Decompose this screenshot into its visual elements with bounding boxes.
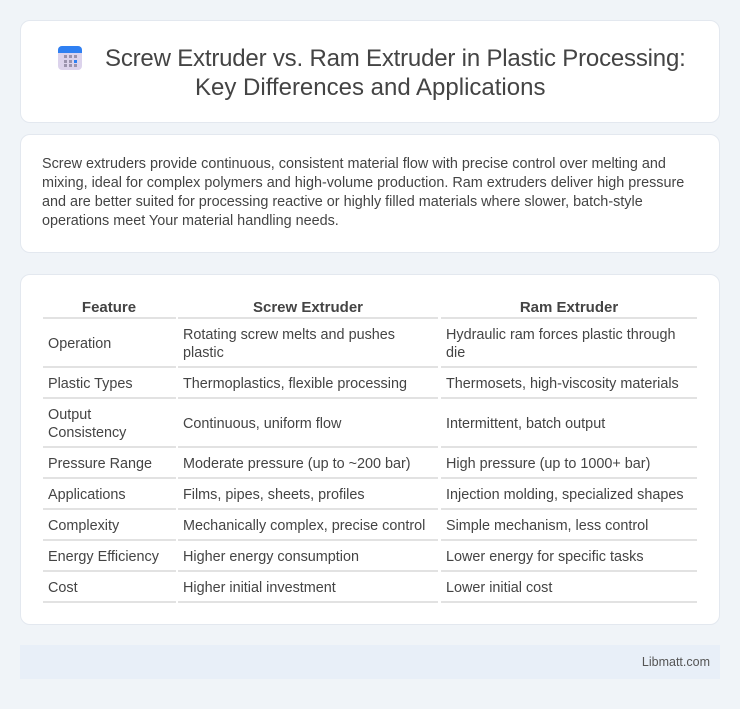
row: complexity: Complexity — [48, 518, 119, 534]
panel: header — [20, 20, 720, 123]
cell: operation ram: die — [446, 345, 465, 361]
table header: feature: Feature — [82, 299, 136, 316]
footer credit: Libmatt.com — [642, 655, 710, 669]
cell: plastic types ram: Thermosets, high-viscosity materials — [446, 376, 679, 392]
cell: operation screw — [183, 327, 395, 361]
cell: pressure screw: Moderate pressure (up to ~200 bar) — [183, 456, 411, 472]
cell: operation ram — [446, 327, 676, 361]
cell: pressure ram: High pressure (up to 1000+ bar) — [446, 456, 650, 472]
row: energy efficiency: Energy Efficiency — [48, 549, 159, 565]
cell: energy screw: Higher energy consumption — [183, 549, 359, 565]
summary text: and are better suited for processing reactive or highly filled materials where slower, batch-style — [42, 194, 643, 210]
title: Screw Extruder vs. Ram Extruder in Plastic Processing: — [105, 45, 686, 72]
cell: operation ram: Hydraulic ram forces plastic through — [446, 327, 676, 343]
cell: applications ram: Injection molding, specialized shapes — [446, 487, 684, 503]
table header: screw extruder: Screw Extruder — [253, 299, 363, 316]
row: cost: Cost — [48, 580, 78, 596]
table header: ram extruder: Ram Extruder — [520, 299, 618, 316]
cell: complexity screw: Mechanically complex, precise control — [183, 518, 425, 534]
title — [105, 45, 686, 101]
row: pressure range: Pressure Range — [48, 456, 152, 472]
cell: complexity ram: Simple mechanism, less control — [446, 518, 648, 534]
row: plastic types: Plastic Types — [48, 376, 133, 392]
cell: applications screw: Films, pipes, sheets, profiles — [183, 487, 365, 503]
panel: summary — [20, 134, 720, 253]
cell: operation screw: Rotating screw melts and pushes — [183, 327, 395, 343]
row: output consistency: Consistency — [48, 425, 126, 441]
cell: output screw: Continuous, uniform flow — [183, 416, 341, 432]
cell: cost screw: Higher initial investment — [183, 580, 336, 596]
summary text — [42, 156, 684, 229]
row: output consistency: Output — [48, 407, 91, 423]
row: applications: Applications — [48, 487, 126, 503]
row: operation: Operation — [48, 336, 111, 352]
footer bar — [20, 645, 720, 679]
cell: output ram: Intermittent, batch output — [446, 416, 605, 432]
row: output consistency — [48, 407, 126, 441]
summary text: operations meet Your material handling needs. — [42, 213, 339, 229]
title: Key Differences and Applications — [195, 74, 545, 101]
cell: energy ram: Lower energy for specific tasks — [446, 549, 644, 565]
panel: comparison table — [20, 274, 720, 625]
cell: cost ram: Lower initial cost — [446, 580, 552, 596]
summary text: mixing, ideal for complex polymers and high-volume production. Ram extruders deliver high pressure — [42, 175, 684, 191]
cell: operation screw: plastic — [183, 345, 224, 361]
summary text: Screw extruders provide continuous, consistent material flow with precise control over melting and — [42, 156, 666, 172]
icon: calendar grid — [58, 46, 82, 70]
cell: plastic types screw: Thermoplastics, flexible processing — [183, 376, 407, 392]
